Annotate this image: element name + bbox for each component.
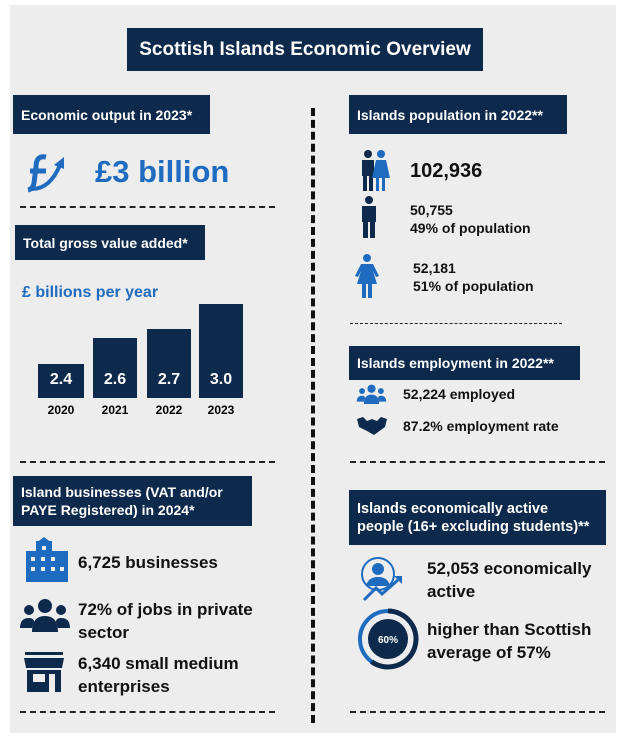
text: higher than average: average of 57%	[427, 643, 551, 662]
text: 2020	[48, 403, 74, 417]
text: higher than average: higher than Scottish	[427, 620, 591, 639]
icon: pound arrow	[28, 154, 64, 192]
icon: man	[362, 196, 376, 238]
text: males: 50,755	[410, 202, 453, 218]
donut: 60%	[358, 608, 419, 670]
text: SMEs: 6,340 small medium	[78, 654, 239, 673]
title	[127, 28, 483, 71]
heading: employment	[349, 346, 580, 380]
chart label: £ billions per year	[22, 284, 158, 301]
icon: person growth	[361, 557, 402, 601]
heading: employment: Islands employment in 2022**	[357, 355, 554, 371]
heading: population: Islands population in 2022**	[357, 106, 543, 122]
text: SMEs: enterprises	[78, 677, 170, 696]
text: 2.7	[158, 371, 180, 388]
text: businesses: 6,725 businesses	[78, 553, 218, 572]
heading: businesses: Island businesses (VAT and/or PAYE Registered) in 2024*	[21, 484, 223, 518]
heading: GVA	[15, 225, 205, 260]
text: economically active: 52,053 economically	[427, 559, 591, 578]
text: economically active: active	[427, 582, 475, 601]
heading: population	[349, 95, 567, 134]
text: higher than average	[427, 620, 591, 662]
text: private sector	[78, 600, 253, 642]
text: 3.0	[210, 371, 232, 388]
heading: GVA: Total gross value added*	[23, 234, 188, 250]
text: females	[413, 260, 534, 294]
text: 2.4	[50, 371, 72, 388]
icon: employed people	[356, 384, 386, 404]
heading: economically active: Islands economically active people (16+ excluding students)**	[357, 500, 589, 534]
text: 2022	[156, 403, 182, 417]
text: SMEs	[78, 654, 239, 696]
icon: handshake	[357, 417, 387, 435]
text: £3 billion: £3 billion	[95, 154, 229, 189]
heading: economic output: Economic output in 2023*	[21, 106, 192, 122]
heading: economically active	[349, 490, 606, 545]
heading: economic output	[13, 95, 210, 134]
icon: woman	[355, 254, 379, 298]
icon: shop	[24, 652, 64, 692]
icon: people	[20, 599, 70, 632]
donut: 60%: 60%	[378, 635, 398, 646]
text: males: 49% of population	[410, 220, 531, 236]
text: 2.6	[104, 371, 126, 388]
text: employed: 52,224 employed	[403, 386, 515, 402]
text: total population: 102,936	[410, 160, 482, 182]
text: 2021	[102, 403, 128, 417]
bar chart	[38, 304, 243, 417]
heading: businesses	[13, 476, 252, 526]
text: economically active	[427, 559, 592, 601]
icon: couple	[362, 150, 390, 191]
text: 2023	[208, 403, 234, 417]
text: employment rate: 87.2% employment rate	[403, 418, 559, 434]
text: females: 52,181	[413, 260, 456, 276]
title: Scottish Islands Economic Overview	[139, 38, 471, 60]
text: males	[410, 202, 531, 236]
text: private sector: sector	[78, 623, 129, 642]
text: females: 51% of population	[413, 278, 534, 294]
text: private sector: 72% of jobs in private	[78, 600, 253, 619]
divider: center vertical	[311, 108, 315, 723]
icon: building	[26, 537, 68, 582]
